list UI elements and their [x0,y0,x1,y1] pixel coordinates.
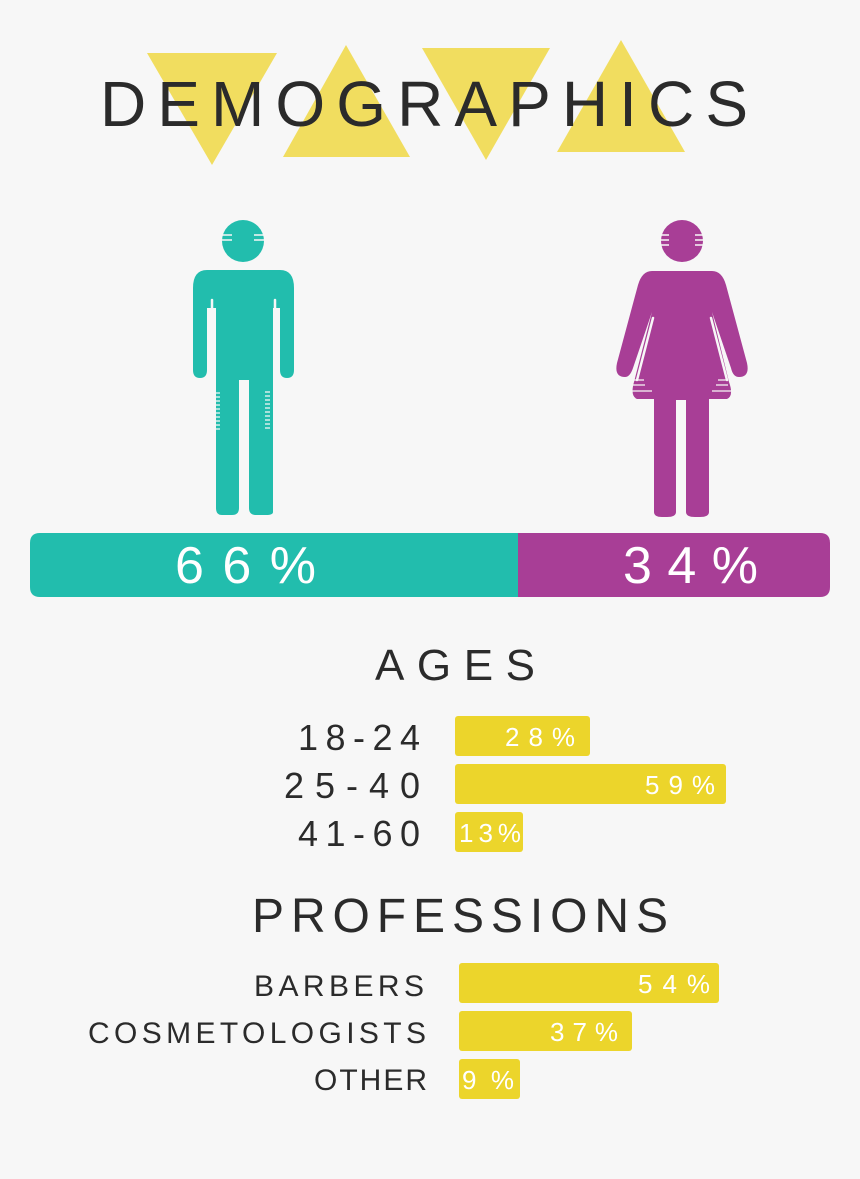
ages bar chart: 25-40 [284,765,420,806]
icon: man [193,220,294,515]
professions bar chart [88,963,719,1099]
professions bar chart: COSMETOLOGISTS [88,1017,426,1050]
professions bar chart: 37% [550,1017,618,1047]
icon: woman [616,220,748,517]
professions bar chart: BARBERS [254,970,424,1003]
professions bar chart: 54% [638,969,710,999]
title [100,40,748,165]
ages bar chart: 13% [459,818,521,848]
ages bar chart: 28% [505,722,575,752]
professions bar chart: OTHER [314,1064,427,1097]
gender bar [30,533,830,597]
professions bar chart: 9% [462,1065,514,1095]
ages bar chart: 41-60 [298,813,420,854]
title: DEMOGRAPHICS [100,68,748,140]
heading: professions: PROFESSIONS [252,890,668,943]
ages bar chart [284,716,726,854]
gender bar: 34% [623,537,758,595]
ages bar chart: 18-24 [298,717,420,758]
gender bar: 66% [175,537,316,595]
heading: ages: AGES [375,641,535,690]
triangles decoration [147,40,685,165]
ages bar chart: 59% [645,770,715,800]
